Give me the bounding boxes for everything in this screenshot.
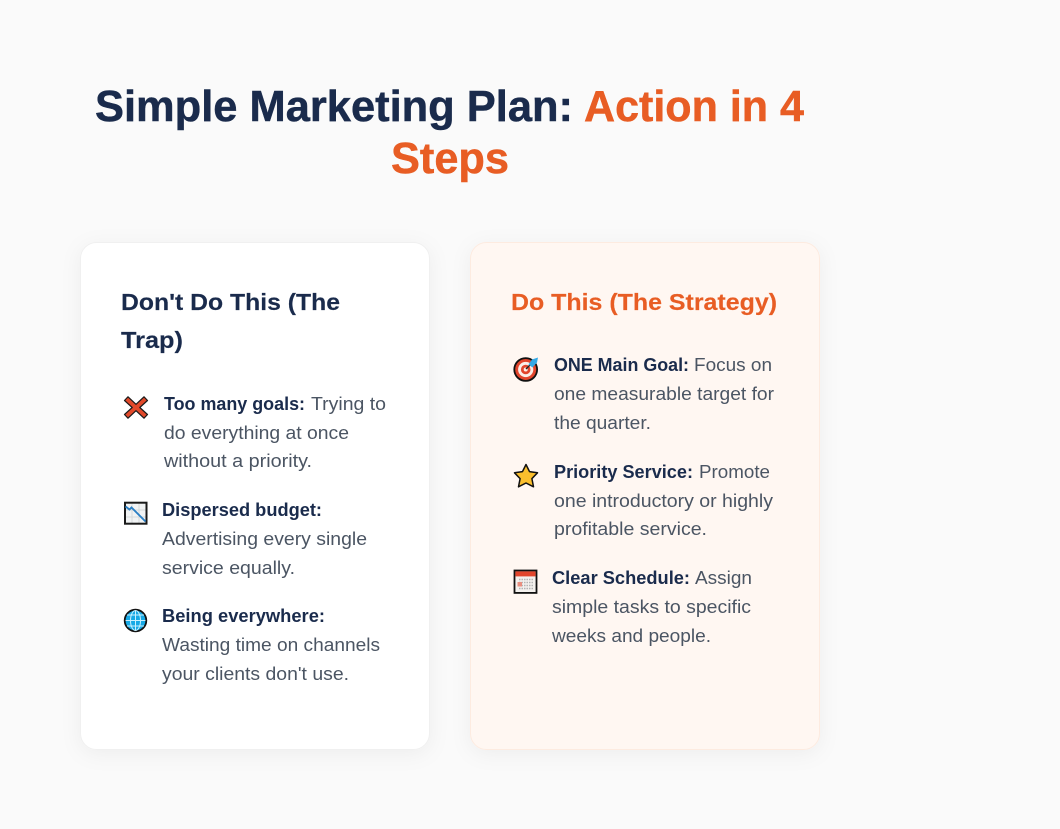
heading: the trap — [121, 289, 340, 353]
item: clear schedule: simple tasks to specific — [552, 597, 751, 617]
title: Simple Marketing Plan: — [95, 82, 573, 131]
item: priority service: Promote — [699, 462, 770, 482]
item: dispersed budget: service equally. — [162, 558, 295, 578]
icon: globe — [125, 610, 146, 631]
item: clear schedule: Clear Schedule: — [552, 568, 690, 588]
item: one main goal: one measurable target for — [554, 384, 774, 404]
item: too many goals: do everything at once — [164, 423, 349, 443]
icon: red cross — [124, 397, 148, 418]
item: priority service: Priority Service: — [554, 462, 693, 482]
item: dispersed budget: Dispersed budget: — [162, 500, 322, 520]
heading: the trap: Trap) — [121, 327, 183, 353]
item: being everywhere: your clients don't use. — [162, 664, 349, 684]
icon: falling chart — [125, 503, 146, 524]
heading: the trap: Don't Do This (The — [121, 289, 340, 315]
item: too many goals — [163, 394, 386, 471]
item: dispersed budget — [162, 500, 367, 578]
item: too many goals: without a priority. — [163, 451, 312, 471]
panel background — [470, 242, 820, 750]
item: clear schedule: Assign — [695, 568, 752, 588]
item: dispersed budget: Advertising every single — [162, 529, 367, 549]
title — [95, 82, 805, 183]
icon: target — [514, 358, 538, 381]
item: clear schedule: weeks and people. — [551, 626, 711, 646]
item: being everywhere: Wasting time on channels — [162, 635, 380, 655]
item: priority service: one introductory or highly — [554, 491, 773, 511]
item: one main goal: the quarter. — [554, 413, 651, 433]
item: being everywhere — [162, 606, 380, 684]
title: Steps — [391, 134, 509, 183]
item: priority service: profitable service. — [554, 519, 707, 539]
item: one main goal: Focus on — [694, 355, 772, 375]
icon: calendar — [514, 570, 536, 593]
item: clear schedule — [551, 568, 752, 646]
icon: star — [514, 464, 538, 487]
item: priority service — [554, 462, 773, 539]
item: too many goals: Trying to — [311, 394, 386, 414]
item: too many goals: Too many goals: — [164, 394, 305, 414]
panel background — [80, 242, 430, 750]
panel: don't do this — [80, 242, 430, 750]
heading: the strategy: Do This (The Strategy) — [511, 289, 777, 315]
item: being everywhere: Being everywhere: — [162, 606, 325, 626]
item: one main goal: ONE Main Goal: — [554, 355, 689, 375]
title: Action in 4 — [584, 82, 805, 131]
panel: do this — [470, 242, 820, 750]
item: one main goal — [554, 355, 774, 433]
